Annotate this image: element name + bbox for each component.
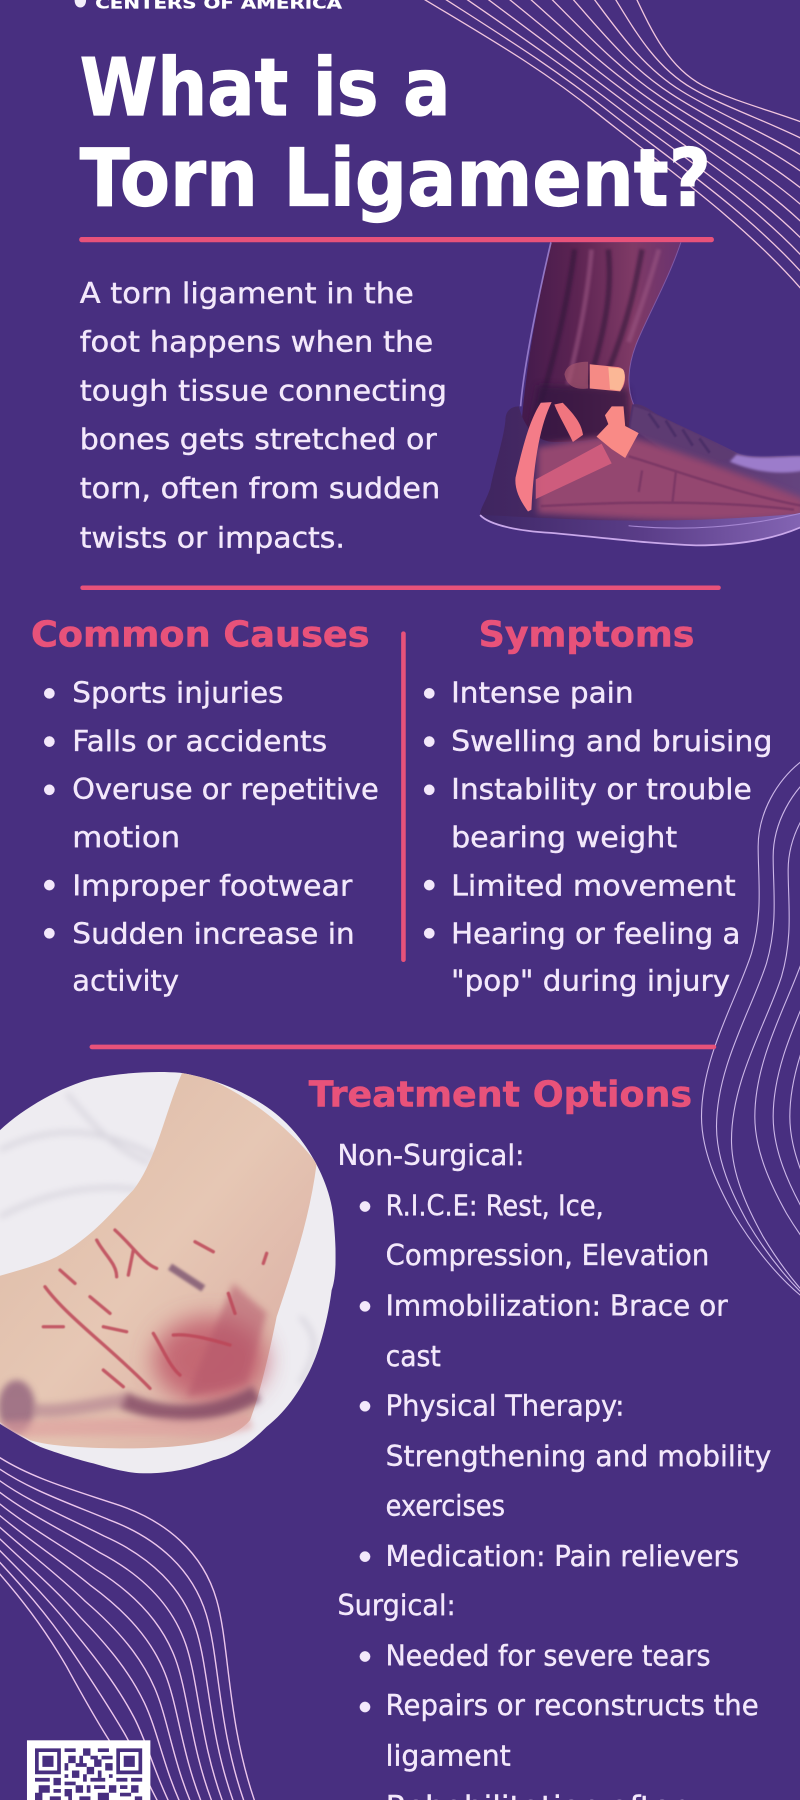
list: treatment options xyxy=(337,1138,771,1800)
shoe laces area xyxy=(630,406,737,461)
intro paragraph: twists or impacts. xyxy=(80,521,345,555)
list: treatment options: R.I.C.E: Rest, Ice, xyxy=(386,1189,604,1223)
list: common causes: Sudden increase in xyxy=(72,917,355,951)
heading: symptoms: Symptoms xyxy=(479,614,694,655)
list: symptoms: Instability or trouble xyxy=(451,772,752,806)
list: symptoms: Intense pain xyxy=(451,676,634,710)
list: treatment options: Repairs or reconstructs the xyxy=(386,1688,759,1722)
intro paragraph: bones gets stretched or xyxy=(80,422,437,456)
intro paragraph: foot happens when the xyxy=(80,324,433,358)
divider: under intro xyxy=(80,585,721,590)
divider: under title xyxy=(79,237,714,242)
intro paragraph: tough tissue connecting xyxy=(80,374,447,408)
logo xyxy=(75,0,343,13)
heading: treatment options: Treatment Options xyxy=(309,1075,692,1116)
list: symptoms: bearing weight xyxy=(451,820,677,854)
list: treatment options: Compression, Elevation xyxy=(386,1238,709,1272)
list: symptoms: Limited movement xyxy=(451,868,736,902)
list: treatment options: Immobilization: Brace or xyxy=(386,1289,728,1323)
list: common causes xyxy=(44,676,379,998)
foot skin xyxy=(0,1070,317,1448)
list: treatment options: Physical Therapy: xyxy=(386,1388,624,1422)
shoe body xyxy=(480,404,800,545)
image: bruised ankle photo xyxy=(0,1067,340,1480)
list: treatment options: ligament xyxy=(386,1739,511,1773)
QR code xyxy=(27,1740,150,1800)
intro paragraph: A torn ligament in the xyxy=(80,276,414,310)
streaks xyxy=(43,1230,267,1388)
intro paragraph: torn, often from sudden xyxy=(80,471,440,505)
divider: above treatment xyxy=(90,1045,716,1049)
sole xyxy=(480,513,800,545)
toe sheen xyxy=(730,454,800,473)
title: Torn Ligament? xyxy=(80,131,711,224)
list: treatment options: Medication: Pain relievers xyxy=(386,1539,739,1573)
list: symptoms: Swelling and bruising xyxy=(451,724,772,758)
decorative waves: bottom left xyxy=(0,1453,257,1800)
list: common causes: Overuse or repetitive xyxy=(72,772,379,806)
list: common causes: motion xyxy=(72,820,180,854)
decorative waves: top right xyxy=(419,0,800,292)
list: common causes: activity xyxy=(72,964,179,998)
list: common causes: Sports injuries xyxy=(72,676,284,710)
leg xyxy=(521,242,681,449)
title xyxy=(80,41,711,224)
foot inside shoe xyxy=(537,437,800,520)
list: common causes: Falls or accidents xyxy=(72,724,327,758)
title: What is a xyxy=(80,41,451,134)
towel xyxy=(0,1067,340,1480)
heading: common causes: Common Causes xyxy=(31,614,370,655)
list: treatment options: cast xyxy=(386,1339,441,1373)
intro paragraph xyxy=(80,276,447,555)
icon: logo mark xyxy=(75,0,86,7)
decorative waves: right side xyxy=(701,760,800,1323)
bruising xyxy=(153,1317,267,1403)
list: common causes: Improper footwear xyxy=(72,868,353,902)
list: treatment options: Needed for severe tears xyxy=(386,1639,710,1673)
list: treatment options: Surgical: xyxy=(337,1588,456,1622)
ligaments xyxy=(515,402,552,511)
list: treatment options: Non-Surgical: xyxy=(337,1138,525,1172)
image: translucent leg and shoe with ligaments xyxy=(480,242,800,545)
ligament glow xyxy=(564,362,588,389)
list: symptoms: "pop" during injury xyxy=(451,964,730,998)
list: treatment options: exercises xyxy=(386,1488,505,1522)
list: symptoms: Hearing or feeling a xyxy=(451,917,740,951)
list: treatment options: Strengthening and mobility xyxy=(386,1439,771,1473)
divider: columns xyxy=(401,631,406,962)
list: symptoms xyxy=(424,676,772,998)
